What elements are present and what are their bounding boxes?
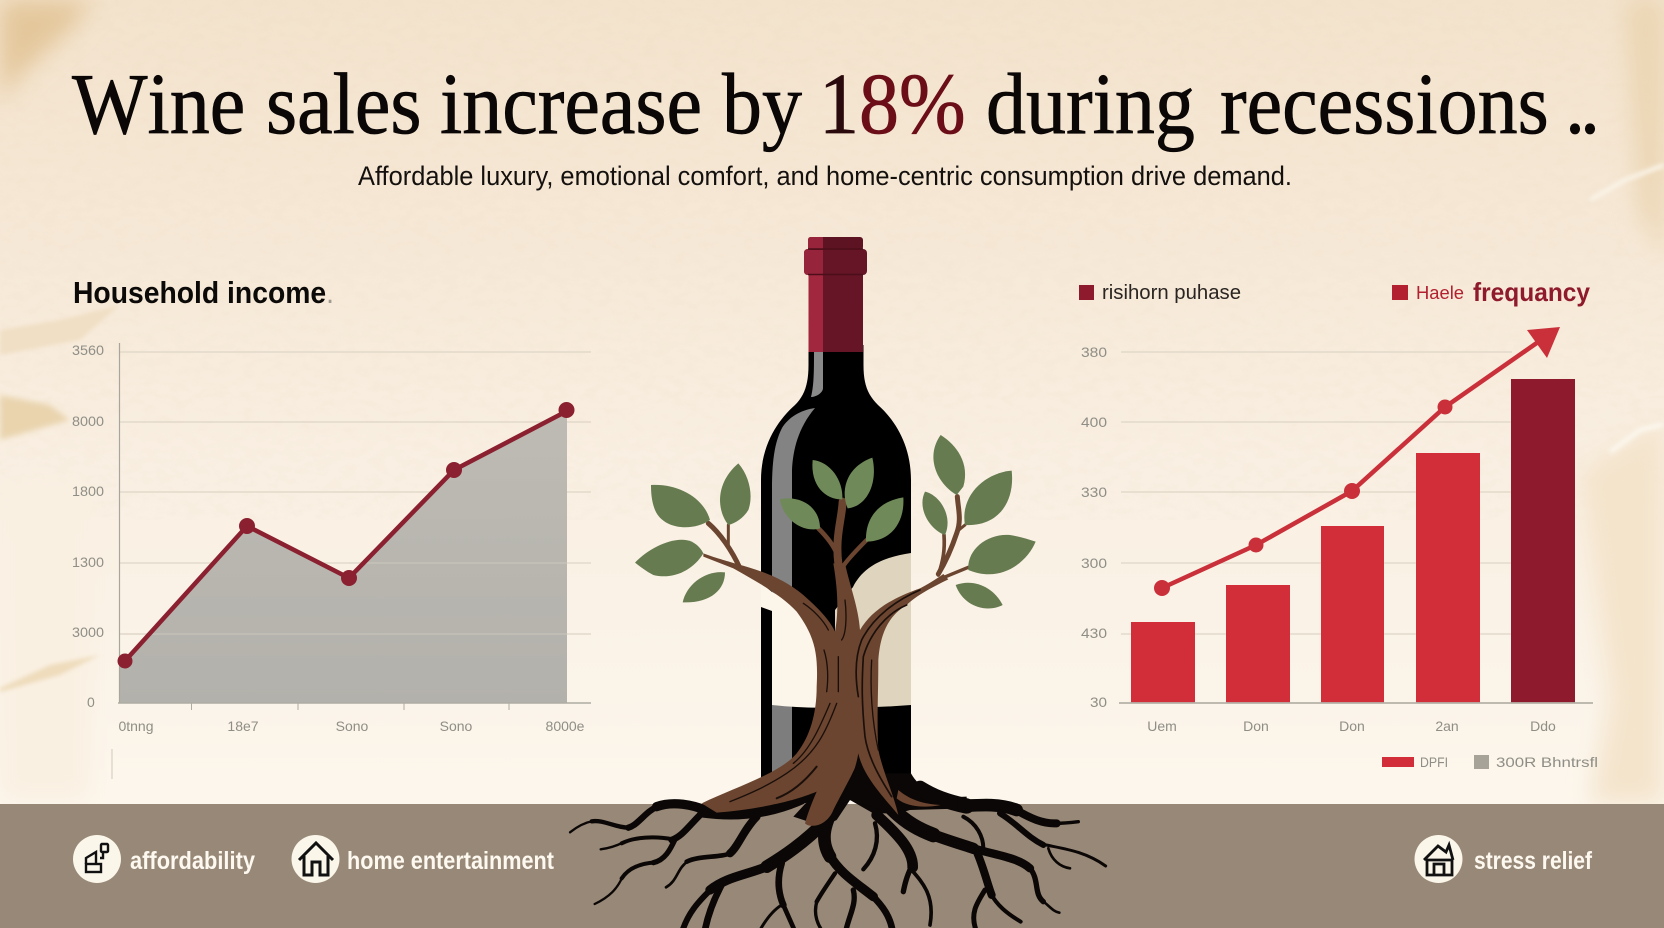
left roots — [570, 785, 827, 928]
roots — [570, 773, 1106, 928]
y axis labels: 380 — [1081, 344, 1107, 360]
icon: tree with roots — [570, 435, 1106, 928]
x axis labels: 18e7 — [227, 718, 259, 734]
title: 8% — [859, 57, 966, 153]
y axis labels: 300 — [1081, 555, 1107, 571]
callout: home entertainment: home entertainment — [347, 847, 555, 875]
callout: home entertainment — [292, 835, 555, 883]
icon: house — [299, 843, 333, 875]
bottom band — [0, 804, 1664, 928]
icon: house with roof — [1424, 845, 1453, 875]
y axis labels: 430 — [1081, 625, 1107, 641]
callout: stress relief: stress relief — [1474, 847, 1593, 875]
x axis labels: Sono — [336, 718, 369, 734]
y axis labels: 0 — [87, 694, 95, 710]
shaded area — [119, 411, 567, 703]
leaves — [635, 435, 1036, 608]
x axis labels: Don — [1339, 718, 1365, 734]
bottom legend — [1382, 754, 1598, 770]
y axis labels: 8000 — [72, 413, 104, 429]
right chart legend: Haele — [1416, 283, 1464, 303]
title: increase — [440, 57, 702, 153]
right chart legend: frequancy — [1473, 277, 1591, 307]
icon: wine bottle — [761, 237, 911, 800]
title: by — [722, 57, 802, 153]
x axis labels: 0tnng — [118, 718, 154, 734]
trend arrow — [1154, 327, 1560, 596]
title: Wine — [72, 57, 245, 153]
income line — [125, 411, 567, 661]
title: . — [1565, 57, 1585, 153]
title: during — [986, 57, 1195, 153]
title: sales — [266, 57, 421, 153]
y axis labels — [72, 342, 104, 710]
bar chart: purchase frequency — [1081, 327, 1598, 770]
y axis labels: 330 — [1081, 484, 1107, 500]
x axis labels: 8000e — [546, 718, 585, 734]
left chart heading: Household income. — [73, 275, 334, 310]
capsule — [808, 262, 863, 352]
x axis labels — [1147, 718, 1556, 734]
line chart: household income — [72, 342, 591, 779]
callout: stress relief — [1414, 835, 1593, 883]
x axis labels: 2an — [1435, 718, 1459, 734]
y axis labels: 3560 — [72, 342, 104, 358]
y axis labels: 3000 — [72, 624, 104, 640]
y axis labels: 1300 — [72, 554, 104, 570]
trunk and limbs — [702, 553, 948, 826]
right roots — [815, 788, 1106, 928]
x axis labels — [118, 718, 585, 734]
subtitle: Affordable luxury, emotional comfort, and home-centric consumption drive demand. — [358, 161, 1292, 191]
label — [761, 583, 840, 708]
right chart legend: risihorn puhase — [1102, 282, 1241, 304]
bottle highlights — [811, 352, 823, 397]
y axis labels: 1800 — [72, 483, 104, 499]
bark lines — [730, 590, 920, 802]
x axis labels: Ddo — [1530, 718, 1556, 734]
callout: affordability: affordability — [130, 847, 255, 875]
icon: affordability — [86, 844, 108, 872]
x axis labels: Don — [1243, 718, 1269, 734]
right chart legend — [1079, 277, 1591, 307]
twigs — [708, 497, 968, 578]
title: recessions — [1220, 57, 1549, 153]
x axis labels: Uem — [1147, 718, 1177, 734]
y axis labels — [1081, 344, 1107, 710]
callout: affordability — [73, 835, 255, 883]
y axis labels: 30 — [1090, 694, 1107, 710]
x axis labels: Sono — [440, 718, 473, 734]
title: . — [1580, 57, 1600, 153]
bottom legend: 300R Bhntrsfl — [1496, 754, 1598, 770]
y axis labels: 400 — [1081, 414, 1107, 430]
title: 1 — [819, 57, 859, 153]
bottom legend: DPFI — [1420, 754, 1448, 770]
